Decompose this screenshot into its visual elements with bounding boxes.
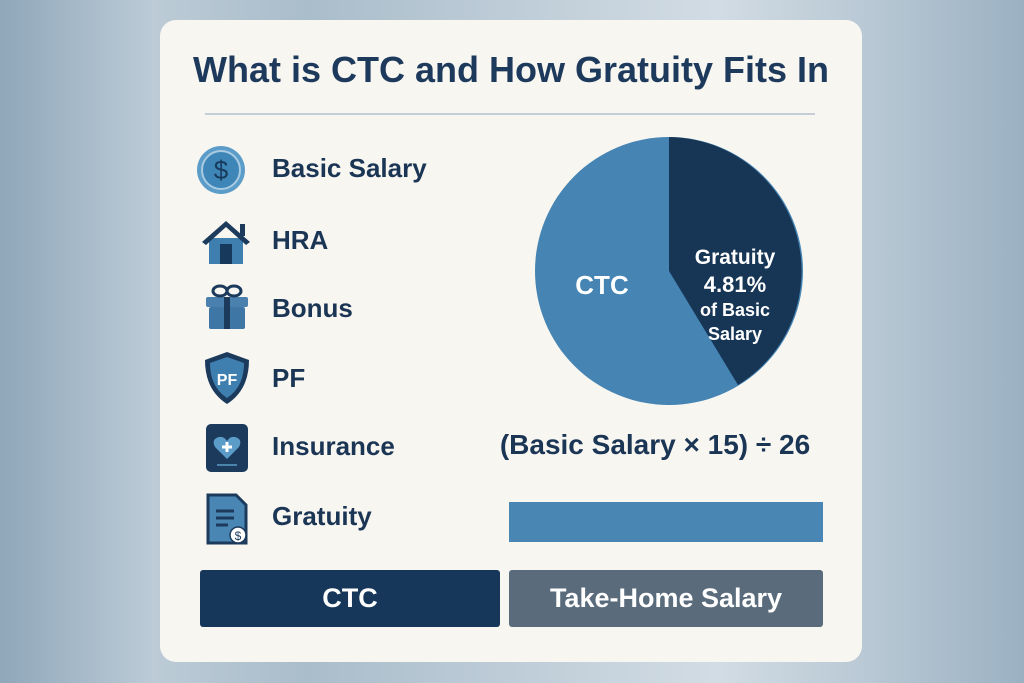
pie chart: of Basic: [700, 300, 770, 320]
icon: dollar coin: [197, 146, 245, 194]
pie chart: Salary: [708, 324, 762, 344]
text: Insurance: Insurance: [272, 431, 395, 461]
button: Take-Home Salary: [509, 570, 823, 627]
pie chart: CTC: [575, 270, 629, 300]
text: Bonus: Bonus: [272, 293, 353, 323]
icon: insurance card: [206, 424, 248, 472]
title: What is CTC and How Gratuity Fits In: [193, 49, 829, 90]
pie chart: 4.81%: [704, 272, 766, 297]
text: Gratuity: Gratuity: [272, 501, 372, 531]
icon: gratuity document: $: [235, 529, 242, 543]
icon: gift: [206, 284, 248, 329]
text: Basic Salary: Basic Salary: [272, 153, 427, 183]
icon: PF shield: PF: [217, 372, 237, 389]
button: CTC: CTC: [322, 583, 378, 613]
panel: card: [160, 20, 862, 662]
text: HRA: HRA: [272, 225, 328, 255]
icon: PF shield: [205, 352, 249, 404]
icon: dollar coin: $: [214, 155, 229, 185]
formula: (Basic Salary × 15) ÷ 26: [500, 429, 810, 460]
button: Take-Home Salary: Take-Home Salary: [550, 583, 782, 613]
bar: gratuity bar: [509, 502, 823, 542]
pie chart: [535, 137, 803, 405]
pie chart: Gratuity: [695, 246, 776, 269]
button: CTC: [200, 570, 500, 627]
icon: gratuity document: [206, 494, 248, 544]
icon: house: [202, 221, 250, 264]
text: PF: PF: [272, 363, 305, 393]
